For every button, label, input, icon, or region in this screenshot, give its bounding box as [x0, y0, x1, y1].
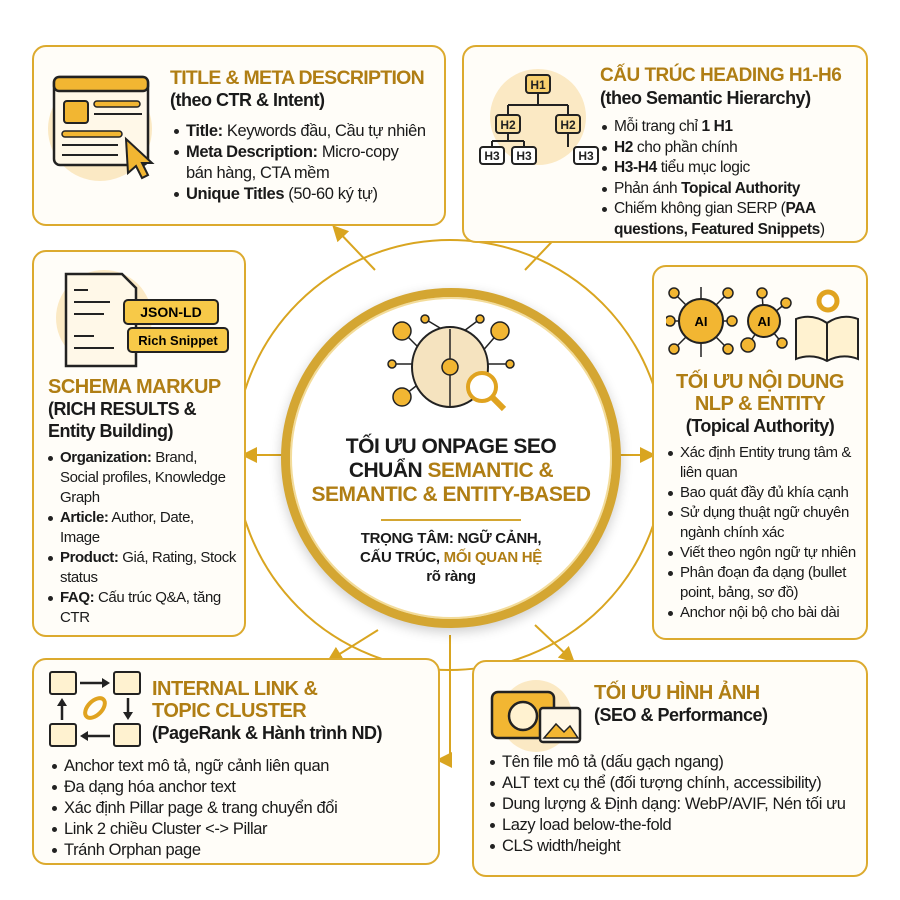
heading: (Topical Authority): [686, 416, 834, 436]
bullet list: Anchor nội bộ cho bài dài: [680, 604, 839, 621]
bullet list: Dung lượng & Định dạng: WebP/AVIF, Nén tối ưu: [502, 795, 846, 813]
subtitle: CẤU TRÚC, MỐI QUAN HỆ: [360, 549, 542, 566]
subtitle: TRỌNG TÂM: NGỮ CẢNH,: [361, 530, 541, 547]
bullet list: [174, 122, 426, 203]
panel: title & meta description: [32, 45, 446, 226]
heading: TỐI ƯU NỘI DUNG: [676, 371, 844, 393]
main title: SEMANTIC & ENTITY-BASED: [311, 483, 590, 506]
bullet list: [668, 444, 856, 621]
bullet list: H3-H4 tiểu mục logic: [614, 159, 750, 176]
panel: image optimization: [472, 660, 868, 877]
bullet list: Chiếm không gian SERP (PAA questions, Featured Snippets): [614, 200, 825, 238]
heading: [676, 370, 844, 436]
heading: [152, 678, 382, 743]
heading: [48, 376, 221, 441]
main title: TỐI ƯU ONPAGE SEO: [346, 435, 556, 458]
bullet list: Link 2 chiều Cluster <-> Pillar: [64, 820, 267, 838]
icon: heading tree: H3: [578, 149, 594, 163]
heading: TITLE & META DESCRIPTION: [170, 67, 424, 89]
bullet list: Organization: Brand, Social profiles, Knowledge Graph: [60, 449, 226, 506]
icon: AI brain, network, book: AI: [694, 314, 708, 329]
bullet list: Đa dạng hóa anchor text: [64, 778, 236, 796]
icon: code document with tags: [56, 270, 229, 368]
bullet list: [602, 117, 825, 238]
bullet list: Phân đoạn đa dạng (bullet point, bảng, sơ đồ): [680, 564, 846, 601]
heading: (SEO & Performance): [594, 705, 768, 725]
bullet list: Product: Giá, Rating, Stock status: [60, 549, 236, 586]
bullet list: Xác định Pillar page & trang chuyển đổi: [64, 799, 337, 817]
central circle: [281, 288, 621, 628]
icon: code document with tags: Rich Snippet: [138, 333, 218, 348]
icon: heading tree: H3: [484, 149, 500, 163]
heading: SCHEMA MARKUP: [48, 376, 221, 398]
panel: internal link: [32, 658, 440, 865]
heading: Entity Building): [48, 421, 173, 441]
subtitle: [360, 519, 542, 585]
bullet list: Tránh Orphan page: [64, 841, 201, 859]
subtitle: rõ ràng: [426, 568, 476, 585]
bullet list: FAQ: Cấu trúc Q&A, tăng CTR: [60, 589, 221, 626]
icon: camera and picture: [490, 680, 582, 752]
icon: heading tree: [479, 69, 599, 165]
bullet list: Title: Keywords đầu, Cầu tự nhiên: [186, 122, 426, 140]
bullet list: [48, 449, 236, 626]
icon: heading tree: H1: [530, 78, 546, 92]
icon: linked pages cycle: [49, 671, 141, 747]
heading: TOPIC CLUSTER: [152, 700, 306, 722]
icon: AI brain, network, book: AI: [758, 314, 770, 329]
bullet list: Sử dụng thuật ngữ chuyên ngành chính xác: [680, 504, 849, 541]
main title: [311, 434, 590, 506]
bullet list: Xác định Entity trung tâm & liên quan: [680, 444, 851, 481]
heading: (PageRank & Hành trình ND): [152, 723, 382, 743]
icon: heading tree: H2: [500, 118, 516, 132]
icon: code document with tags: JSON-LD: [140, 304, 202, 320]
bullet list: bán hàng, CTA mềm: [186, 164, 329, 182]
bullet list: H2 cho phần chính: [614, 138, 737, 156]
bullet list: Mỗi trang chỉ 1 H1: [614, 118, 733, 135]
bullet list: Phản ánh Topical Authority: [614, 180, 800, 196]
bullet list: Bao quát đầy đủ khía cạnh: [680, 484, 848, 501]
bullet list: Unique Titles (50-60 ký tự): [186, 185, 378, 203]
heading: (theo Semantic Hierarchy): [600, 88, 811, 108]
icon: browser with cursor: [48, 76, 154, 181]
bullet list: [52, 757, 337, 859]
bullet list: Tên file mô tả (dấu gạch ngang): [502, 753, 724, 771]
heading: [170, 67, 424, 110]
icon: heading tree: H2: [560, 118, 576, 132]
heading: [594, 680, 768, 725]
bullet list: Anchor text mô tả, ngữ cảnh liên quan: [64, 757, 329, 775]
heading: CẤU TRÚC HEADING H1-H6: [600, 65, 841, 86]
panel: NLP & entity: [652, 265, 868, 640]
heading: TỐI ƯU HÌNH ẢNH: [594, 682, 760, 704]
heading: NLP & ENTITY: [695, 393, 825, 415]
bullet list: CLS width/height: [502, 837, 620, 855]
heading: (RICH RESULTS &: [48, 399, 196, 419]
panel: heading structure: [462, 45, 868, 243]
bullet list: Lazy load below-the-fold: [502, 816, 671, 834]
bullet list: Meta Description: Micro-copy: [186, 143, 399, 161]
bullet list: ALT text cụ thể (đối tượng chính, accessibility): [502, 774, 821, 792]
bullet list: Article: Author, Date, Image: [60, 509, 194, 546]
bullet list: [490, 753, 846, 855]
icon: heading tree: H3: [516, 149, 532, 163]
heading: [600, 64, 842, 108]
heading: (theo CTR & Intent): [170, 90, 324, 110]
panel: schema markup: [32, 250, 246, 637]
bullet list: Viết theo ngôn ngữ tự nhiên: [680, 544, 856, 561]
main title: CHUẨN SEMANTIC &: [349, 459, 553, 482]
heading: INTERNAL LINK &: [152, 678, 317, 700]
icon: AI brain, network, book: [666, 287, 859, 362]
icon: brain network with magnifier: [387, 314, 515, 412]
